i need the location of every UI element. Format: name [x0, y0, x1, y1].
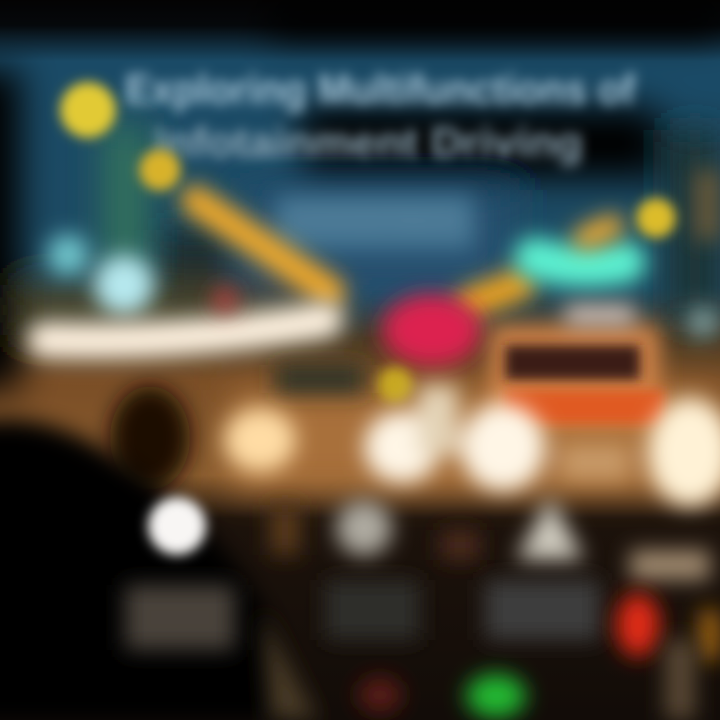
indicator: dark red light — [358, 677, 402, 713]
node: teal circle — [47, 234, 89, 276]
indicator: red light — [616, 593, 660, 657]
panel: right orange card — [490, 305, 665, 425]
title: Exploring Multifunctions of — [125, 66, 636, 114]
light 5 — [560, 445, 630, 480]
node: crimson shape — [382, 294, 482, 366]
text block: left caption — [125, 585, 235, 650]
subtitle block — [275, 195, 475, 250]
light 1 — [224, 408, 296, 472]
silhouette: arm highlight — [262, 610, 318, 720]
light 2 — [364, 411, 440, 483]
node: yellow circle right — [636, 198, 676, 238]
title: Infotainment Driving — [153, 119, 583, 167]
subtitle block: Connected features — [288, 208, 462, 230]
background: dark areas and sky accents — [0, 0, 720, 490]
glowing white lights row — [224, 385, 720, 506]
silhouette: person in the foreground — [0, 386, 318, 720]
connector: mint band — [535, 258, 625, 266]
indicator: green light — [466, 674, 526, 718]
text block: centre caption — [325, 580, 420, 640]
title — [125, 66, 636, 167]
node: yellow circle small — [139, 149, 181, 191]
panel: centre small card — [275, 365, 365, 393]
lower dashboard row — [125, 496, 720, 720]
bar: white glowing band — [45, 320, 325, 341]
icon: grey circle — [336, 500, 392, 556]
post: right tan — [665, 640, 695, 720]
node: yellow square — [377, 367, 413, 403]
icon: grey triangle — [516, 496, 584, 560]
silhouette: shoulders — [0, 420, 305, 720]
node: yellow circle large — [60, 82, 116, 138]
warm accents — [270, 505, 300, 555]
connector: orange rising — [470, 284, 520, 303]
light 4 — [648, 398, 720, 506]
node: right edge pale — [687, 306, 719, 338]
light 3 — [461, 403, 545, 491]
connector: green vertical — [105, 125, 147, 275]
right connector and nodes — [377, 170, 720, 403]
connector: orange diagonal — [195, 200, 330, 292]
text block: right caption — [485, 580, 600, 640]
silhouette: head — [110, 386, 190, 490]
left orange connector and nodes — [45, 82, 330, 341]
node: pale blue circle — [94, 255, 154, 315]
icon: white circle — [148, 497, 206, 555]
indicator: orange edge — [700, 610, 720, 660]
